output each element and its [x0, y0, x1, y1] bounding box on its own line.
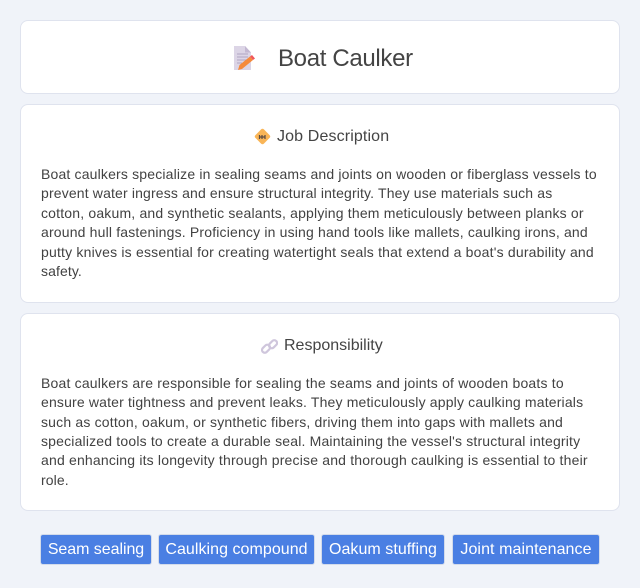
panel: job description: [20, 104, 620, 303]
panel: responsibility: [20, 313, 620, 511]
text: job description body: putty knives is essential for creating watertight seals that extend a boat's durability and: [41, 244, 594, 260]
tag: oakum stuffing: [321, 534, 445, 565]
tag: seam sealing: Seam sealing: [48, 541, 144, 558]
text: responsibility body: [41, 375, 588, 488]
text: job description body: Boat caulkers specialize in sealing seams and joints on wooden or fiberglass vessels to: [41, 166, 597, 182]
tag: caulking compound: Caulking compound: [165, 541, 308, 558]
icon: construction diamond: [254, 128, 270, 144]
panel: title card: [20, 20, 620, 94]
text: job description body: safety.: [41, 263, 82, 279]
tag: caulking compound: [158, 534, 315, 565]
icon: document with pencil: [234, 46, 255, 70]
tag: joint maintenance: [452, 534, 600, 565]
tag: oakum stuffing: Oakum stuffing: [329, 541, 437, 558]
tag: seam sealing: [40, 534, 152, 565]
text: job description body: [41, 166, 597, 279]
text: responsibility body: ensure water tightness and prevent leaks. They meticulously apply caulking materials: [41, 394, 583, 410]
icon: chain link: [261, 339, 278, 354]
text: responsibility body: Boat caulkers are responsible for sealing the seams and joints of wooden boats to: [41, 375, 564, 391]
tag: joint maintenance: Joint maintenance: [460, 541, 592, 558]
text: responsibility body: such as cotton, oakum, or synthetic fibers, driving them into gaps with mallets and: [41, 414, 563, 430]
text: responsibility body: specialized tools to create a durable seal. Maintaining the vessel's structural integrity: [41, 433, 580, 449]
text: responsibility body: and enhancing its longevity through precise and thorough caulking is essential to their: [41, 452, 588, 468]
text: job description body: prevent water ingress and ensure structural integrity. They use materials such as: [41, 185, 552, 201]
heading: responsibility: Responsibility: [284, 337, 383, 354]
title: Boat Caulker: [278, 45, 413, 72]
text: job description body: cotton, oakum, and synthetic sealants, applying them meticulously between planks or: [41, 205, 584, 221]
text: responsibility body: role.: [41, 472, 69, 488]
heading: job description: Job Description: [277, 128, 389, 145]
text: job description body: around hull fastenings. Proficiency in using hand tools like mallets, caulking irons, and: [41, 224, 588, 240]
